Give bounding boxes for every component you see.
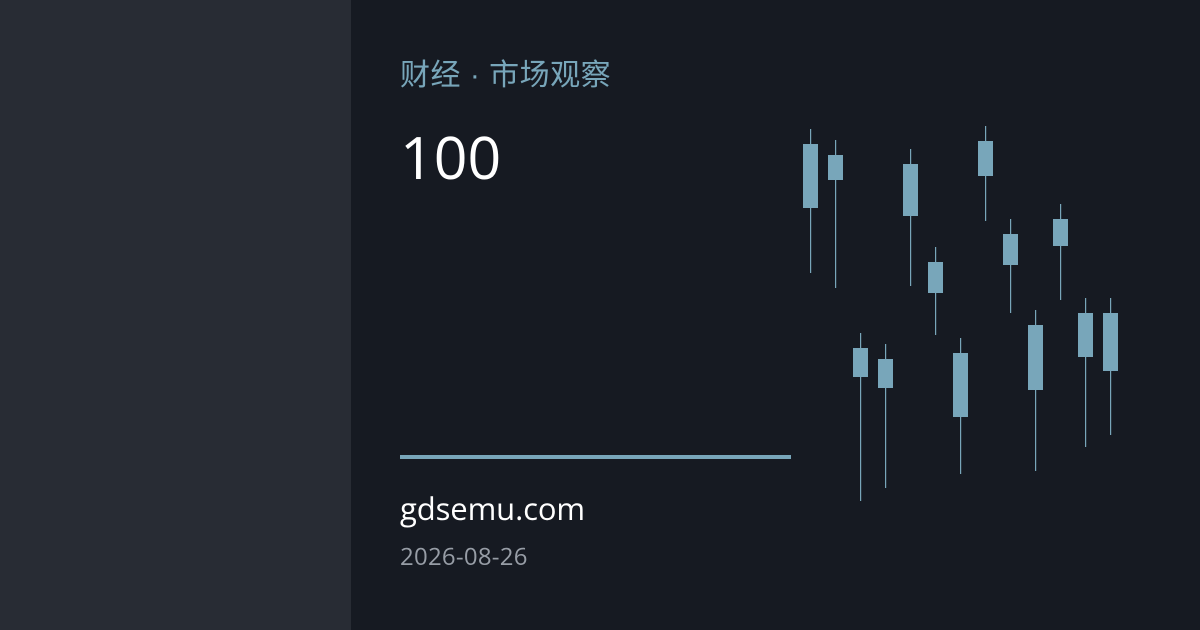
candle 6	[928, 247, 943, 335]
accent divider	[400, 455, 791, 459]
candle 5	[903, 149, 918, 286]
left side panel	[0, 0, 351, 630]
candle 11	[1053, 204, 1068, 300]
candle 10	[1028, 310, 1043, 471]
kicker heading: 财经 · 市场观察	[400, 59, 611, 92]
candle 8	[978, 126, 993, 221]
candle 9	[1003, 219, 1018, 313]
candle 7	[953, 338, 968, 474]
candle 1	[803, 129, 818, 273]
site domain: gdsemu.com	[400, 488, 585, 530]
candle 12	[1078, 298, 1093, 447]
title number: 100	[400, 117, 501, 197]
candle 3	[853, 333, 868, 501]
candle 4	[878, 344, 893, 488]
candle 13	[1103, 298, 1118, 435]
candle 2	[828, 140, 843, 288]
date: 2026-08-26	[400, 540, 528, 573]
